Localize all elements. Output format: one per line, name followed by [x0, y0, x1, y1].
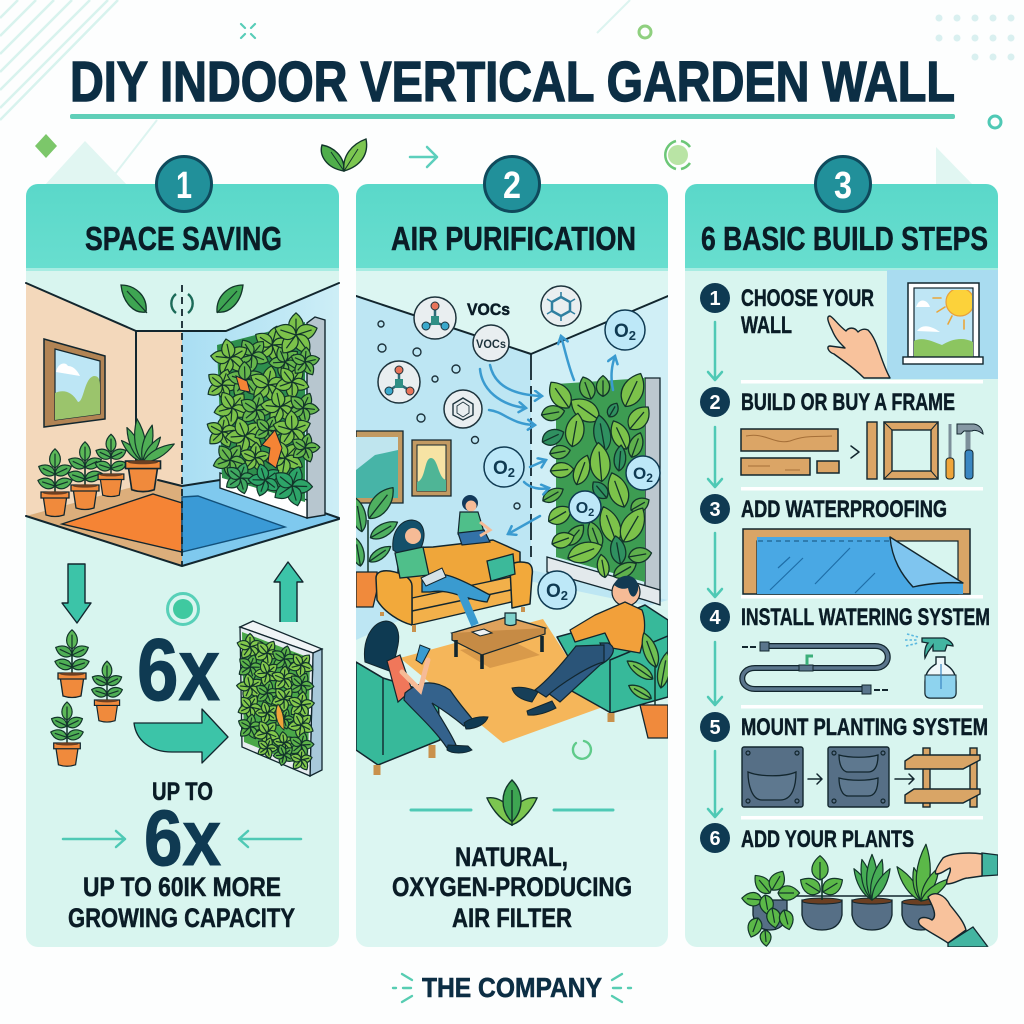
right wall: [182, 283, 339, 518]
step 3: add waterproofing: [700, 487, 983, 594]
panel: six build steps: [685, 156, 998, 947]
mini living wall panel: [231, 621, 322, 776]
icon: double leaf: [321, 139, 367, 171]
label: VOCs: VOCs: [467, 300, 510, 319]
left wall: [26, 283, 182, 516]
step 2: build or buy a frame: BUILD OR BUY A FRAME: [741, 389, 955, 416]
walls: [356, 296, 668, 640]
molecule: top: [541, 286, 581, 326]
number badge 3: [816, 156, 870, 212]
plant 3: [850, 854, 894, 930]
icon: target dot: [168, 594, 198, 624]
frame with membrane: [743, 529, 970, 594]
caption: oxygen producing air filter: AIR FILTER: [452, 903, 572, 933]
molecule: left: [378, 361, 420, 403]
panel header: [26, 184, 339, 268]
badge 6: [700, 823, 730, 853]
step 3: add waterproofing: ADD WATERPROOFING: [741, 496, 947, 523]
step 1 text: WALL: [741, 312, 792, 339]
step arrow 2: [708, 427, 722, 487]
brand: the company: THE COMPANY: [422, 972, 602, 1003]
panel: space saving: [26, 156, 339, 947]
arrow: up: [274, 562, 303, 622]
oxygen bubbles: 2: [588, 507, 594, 519]
molecule: top-left: [414, 297, 456, 339]
stat: 6x large: 6x: [137, 620, 220, 719]
badge 3: [700, 494, 730, 524]
step arrow 3: [708, 533, 722, 597]
step 5: mount planting system: [700, 705, 988, 807]
icon: three leaves: [487, 780, 537, 826]
upper hand and cuff: [935, 853, 998, 884]
badge 5: [700, 712, 730, 742]
cushion: [487, 554, 515, 581]
frame and tools: [867, 422, 983, 479]
oxygen bubbles: O: [614, 321, 629, 342]
molecule: benzene ring: [444, 390, 482, 428]
panel header: [356, 184, 668, 268]
divider lines: [411, 808, 613, 812]
icon: teal ring: [989, 116, 1001, 128]
label: up to: UP TO: [152, 778, 213, 806]
oxygen bubbles: 2: [508, 465, 515, 480]
caption: growing capacity: UP TO 60IK MORE: [83, 872, 281, 902]
living wall after: [200, 313, 325, 518]
wooden shelf: [905, 748, 980, 807]
icon: green ring: [573, 741, 591, 759]
rug: [400, 619, 600, 743]
rail: [796, 895, 914, 897]
caption: growing capacity: GROWING CAPACITY: [68, 903, 295, 933]
window backdrop: [887, 270, 998, 379]
right arm: [510, 562, 532, 608]
caption: oxygen producing air filter: OXYGEN-PRODUCING: [392, 872, 632, 902]
icon: green ring: [639, 26, 651, 38]
room before and after illustration: [26, 283, 339, 566]
step arrow 5: [708, 751, 722, 817]
coffee table: [452, 613, 545, 669]
panel: air purification: [350, 156, 673, 947]
heading: air purification: AIR PURIFICATION: [391, 220, 636, 257]
left arm: [376, 571, 412, 625]
child on sofa back: [458, 495, 490, 545]
divider dashes: [181, 285, 183, 566]
badge 2: [700, 387, 730, 417]
badge 2: 2: [709, 392, 721, 414]
badge 1: [700, 283, 730, 313]
decorative background shapes: [0, 0, 1014, 186]
icon: green diamond: [35, 134, 57, 158]
small bubbles: [378, 321, 520, 509]
badge 1: 1: [709, 288, 721, 310]
picture frame: [44, 339, 105, 427]
hand pointing: [828, 316, 890, 378]
living room scene: [350, 286, 673, 800]
plant 1: trailing pothos: [741, 868, 800, 947]
circle: VOCs: VOCs: [476, 337, 506, 351]
step arrow 1: [708, 322, 722, 380]
plant 2: [800, 855, 844, 931]
arrow: right toward 6x: [63, 831, 125, 847]
badge 6: 6: [709, 828, 721, 850]
woman in left armchair: [356, 621, 488, 775]
number badge 1: 1: [176, 165, 192, 207]
caption: oxygen producing air filter: NATURAL,: [455, 842, 568, 872]
stat: 6x: 6x: [144, 793, 221, 882]
heading: space saving: SPACE SAVING: [85, 220, 282, 257]
badge 5: 5: [709, 717, 721, 739]
badge 4: 4: [709, 607, 721, 629]
circle: VOCs: [473, 325, 509, 361]
man in right armchair: [512, 576, 668, 722]
icon: leaves and split ring: [121, 285, 243, 313]
rug blue: [182, 496, 285, 552]
spray bottle: [905, 634, 956, 698]
step arrow 4: [708, 642, 722, 705]
title underline: [70, 114, 955, 119]
arrow: left toward 6x: [239, 831, 301, 847]
number badge 1: [156, 156, 212, 212]
window: [903, 283, 983, 364]
caption: growing capacity: [68, 872, 295, 933]
caption: oxygen producing air filter: [392, 842, 632, 933]
left plant with pot: [356, 487, 398, 608]
potted plants before: [36, 418, 176, 516]
icon: teal cross sparkle: [241, 24, 255, 38]
step 1: choose your wall: [700, 270, 998, 379]
chevron: [851, 446, 859, 458]
step 1 text: [741, 285, 874, 339]
floor: [356, 582, 648, 640]
sparks left: [393, 974, 412, 1002]
floor left: [26, 480, 182, 566]
oxygen bubbles: 2: [646, 471, 653, 485]
wall pictures: [356, 431, 451, 503]
hose with dripper: [742, 642, 888, 694]
oxygen bubbles: [484, 310, 660, 609]
icon: teal arrow: [410, 147, 437, 167]
sofa: [376, 540, 532, 632]
felt pocket panels: [742, 747, 914, 807]
badge 3: 3: [709, 499, 721, 521]
step 2: build or buy a frame: [700, 380, 983, 479]
panel header: [685, 184, 998, 268]
lower hand and cuff: [919, 894, 988, 947]
arrow: down: [62, 564, 91, 623]
wood planks: [741, 429, 839, 475]
large spiky plant: [119, 418, 176, 492]
oxygen bubbles: O: [546, 581, 561, 602]
sparks right: [612, 974, 631, 1002]
step 4: install watering system: [700, 595, 990, 698]
oxygen bubbles: 2: [629, 328, 636, 343]
oxygen bubbles: O: [576, 500, 588, 517]
number badge 2: [484, 156, 540, 212]
small potted plants: [49, 630, 124, 766]
badge 4: [700, 602, 730, 632]
right plant with pot: [626, 632, 668, 739]
step 6: add your plants: [700, 816, 998, 947]
seated person on sofa: [393, 520, 490, 625]
oxygen bubbles: O: [493, 458, 508, 479]
arrow: curved right: [134, 709, 228, 763]
step 6: add your plants: ADD YOUR PLANTS: [741, 826, 914, 853]
icon: green target: [665, 141, 690, 169]
number badge 3: 3: [834, 165, 852, 207]
number badge 2: 2: [503, 165, 521, 207]
flow arrows: [480, 336, 615, 534]
oxygen bubbles: 2: [561, 588, 568, 603]
rug orange: [62, 494, 182, 552]
living wall: [539, 369, 660, 605]
oxygen bubbles: O: [633, 464, 646, 483]
floor right: [182, 480, 339, 566]
step 1 text: CHOOSE YOUR: [741, 285, 874, 312]
plant 4: [896, 844, 947, 931]
